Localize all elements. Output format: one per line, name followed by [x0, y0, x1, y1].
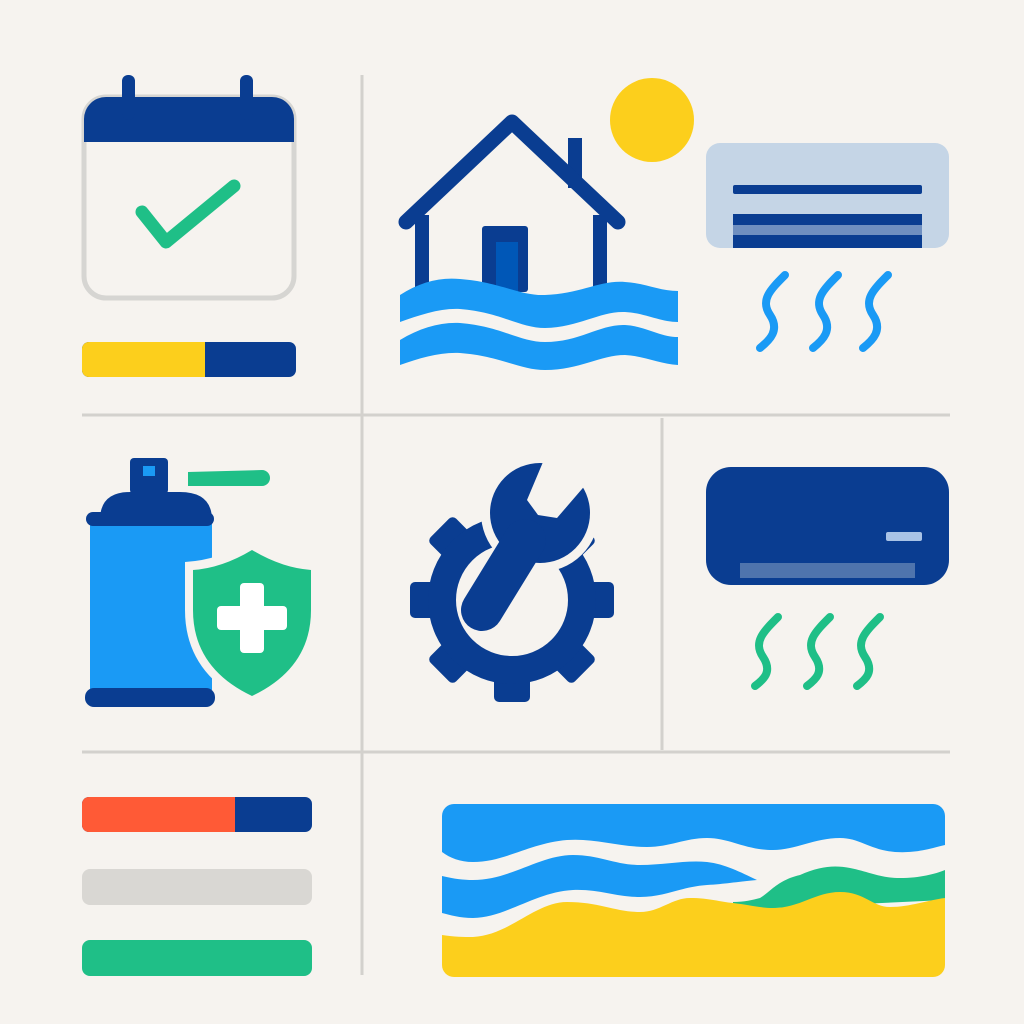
icon: green airflow waves — [755, 617, 880, 686]
icon: sun — [610, 78, 694, 162]
bars: status list — [82, 797, 312, 976]
icon: shield with cross — [185, 540, 319, 705]
icon: air conditioner (light) — [706, 143, 949, 248]
icon: gear with wrench — [410, 460, 614, 702]
icon: flooded house — [400, 122, 678, 370]
progress bar: yellow/navy — [82, 342, 296, 377]
icon: blue airflow waves — [760, 275, 888, 348]
icon: calendar with check — [84, 75, 294, 298]
icon: air conditioner (dark) — [706, 467, 949, 585]
panel: coastal waves — [442, 800, 945, 980]
icon: spray can — [85, 458, 270, 707]
